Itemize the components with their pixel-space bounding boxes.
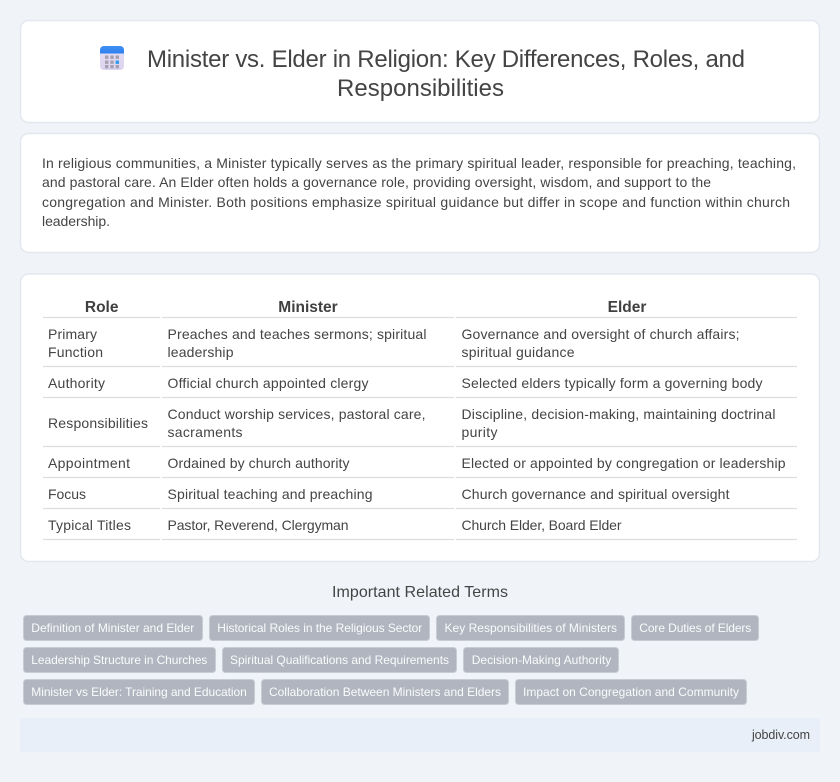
heading: important related terms: Important Related Terms [332,584,508,601]
table header: Minister [278,299,338,316]
text block: introduction [42,155,796,229]
row: focus: Church governance and spiritual oversight [462,486,730,502]
chip: core duties [632,616,758,640]
row: typical titles: Pastor, Reverend, Clergyman [168,517,348,533]
panel: introduction [20,134,820,252]
row: primary function: leadership [168,344,234,360]
chip: key responsibilities: Key Responsibilities of Ministers [444,621,617,635]
row: responsibilities: purity [462,424,498,440]
chip: historical roles: Historical Roles in the Religious Sector [217,621,422,635]
chip: historical roles [210,616,430,640]
row: primary function: Primary [48,326,97,342]
row: focus: Focus [48,486,86,502]
panel: header [20,20,820,122]
row: responsibilities: Responsibilities [48,415,148,431]
chip: key responsibilities [436,616,624,640]
row: responsibilities: sacraments [168,424,242,440]
row: focus [48,486,730,502]
row: primary function: Governance and oversight of church affairs; [462,326,740,342]
chip: core duties: Core Duties of Elders [639,621,751,635]
table header: Elder [608,299,646,316]
chip: leadership structure: Leadership Structure in Churches [31,653,207,667]
title: Responsibilities [337,75,504,102]
row: appointment: Elected or appointed by congregation or leadership [462,455,786,471]
row: primary function [48,326,740,360]
related term chips [24,616,758,704]
row: primary function: Function [48,344,103,360]
row: typical titles: Typical Titles [48,517,131,533]
row: responsibilities: Discipline, decision-making, maintaining doctrinal [462,406,776,422]
row: authority: Official church appointed clergy [168,375,368,391]
row: typical titles [48,517,622,533]
title: Minister vs. Elder in Religion: Key Differences, Roles, and [147,46,745,73]
chip: training and education [24,680,254,704]
chip: spiritual qualifications [222,648,456,672]
row: authority [48,375,762,391]
row: appointment: Ordained by church authority [168,455,350,471]
row: primary function: Preaches and teaches sermons; spiritual [168,326,426,342]
title [147,46,745,102]
row: appointment [48,455,786,471]
row: primary function: spiritual guidance [462,344,575,360]
row: responsibilities: Conduct worship services, pastoral care, [168,406,426,422]
chip: training and education: Minister vs Elder: Training and Education [31,685,247,699]
chip: impact: Impact on Congregation and Community [523,685,739,699]
row: appointment: Appointment [48,455,130,471]
row: authority: Selected elders typically form a governing body [462,375,762,391]
chip: definition [24,616,202,640]
table header: Role [85,299,119,316]
text block: introduction: leadership. [42,213,110,229]
chip: decision-making [464,648,618,672]
row: authority: Authority [48,375,105,391]
panel: comparison table [20,274,820,562]
chip: spiritual qualifications: Spiritual Qualifications and Requirements [230,653,449,667]
chip: definition: Definition of Minister and Elder [31,621,194,635]
footer: jobdiv.com [751,728,810,742]
icon: calendar [100,46,124,70]
row: focus: Spiritual teaching and preaching [168,486,372,502]
text block: introduction: and pastoral care. An Elder often holds a governance role, providing oversight, wisdom, and support to the [42,174,711,190]
row: typical titles: Church Elder, Board Elder [462,517,622,533]
chip: leadership structure [24,648,216,672]
text block: introduction: congregation and Minister. Both positions emphasize spiritual guidance but differ in scope and function within church [42,194,790,210]
chip: collaboration: Collaboration Between Ministers and Elders [269,685,501,699]
chip: collaboration [262,680,508,704]
table header [85,299,646,316]
footer [20,718,820,752]
text block: introduction: In religious communities, a Minister typically serves as the primary spiritual leader, responsible for preaching, teaching, [42,155,796,171]
row: responsibilities [48,406,776,440]
chip: impact [516,680,746,704]
chip: decision-making: Decision-Making Authority [472,653,611,667]
